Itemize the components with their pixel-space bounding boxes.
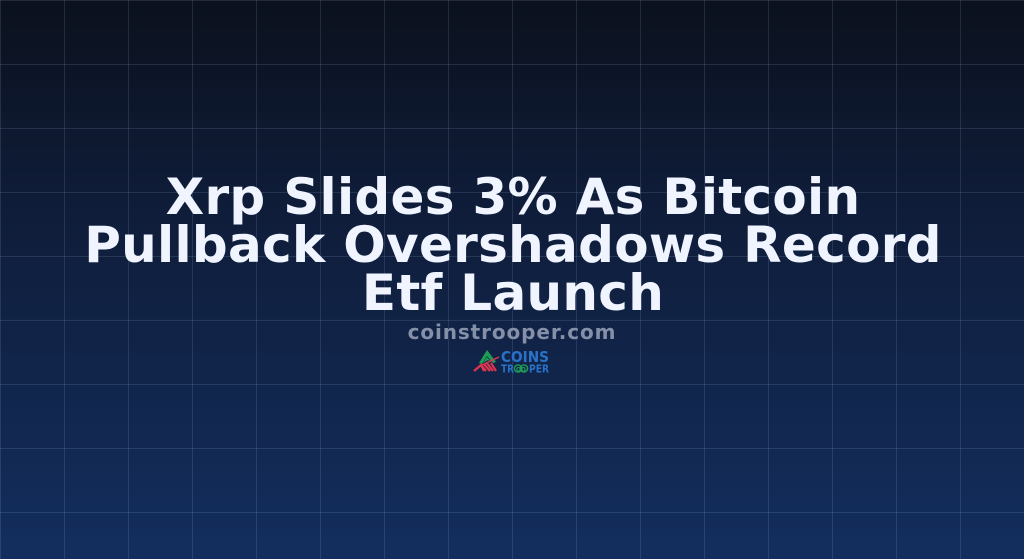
title: Xrp Slides 3% As Bitcoin [166,168,860,226]
icon: coinstrooper logo [473,348,549,375]
site name: coinstrooper.com [408,320,616,344]
icon: coinstrooper logo: OO [516,366,526,374]
title: Etf Launch [362,264,664,322]
title [84,168,942,322]
title: Pullback Overshadows Record [84,216,942,274]
